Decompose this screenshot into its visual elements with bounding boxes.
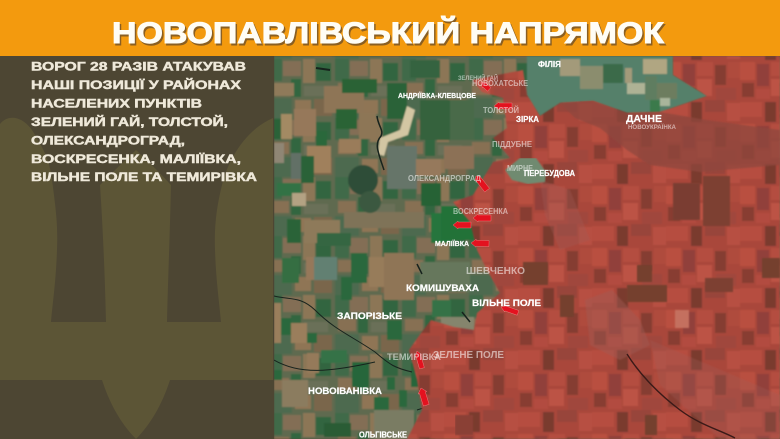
title: НОВОПАВЛІВСЬКИЙ НАПРЯМОК xyxy=(112,16,665,50)
map: settlement labels: ТОЛСТОЙ xyxy=(483,106,519,115)
map: farmland fields xyxy=(274,56,780,439)
map: settlement labels: НОВОХАТСЬКЕ xyxy=(472,79,529,88)
header band xyxy=(0,0,780,56)
map: settlement labels: МАЛІЇВКА xyxy=(435,239,470,248)
icon: trident emblem watermark xyxy=(0,118,273,439)
text block: attack summary: ЗЕЛЕНИЙ ГАЙ, ТОЛСТОЙ, xyxy=(31,114,228,129)
text block: attack summary: ВОСКРЕСЕНКА, МАЛІЇВКА, xyxy=(31,151,241,166)
map: occupied territory xyxy=(407,56,780,439)
arrow: Толстой xyxy=(494,102,512,110)
arrows: attack directions xyxy=(414,79,519,407)
map: settlement labels: ТЕМИРІВКА xyxy=(387,352,441,363)
map: settlement labels: ФІЛІЯ xyxy=(538,60,561,69)
map: unoccupied Myrne pocket xyxy=(505,158,546,184)
panel: satellite map xyxy=(274,56,780,439)
map: settlement labels: ВОСКРЕСЕНКА xyxy=(453,207,508,216)
map: settlement labels: ОЛЕКСАНДРОГРАД xyxy=(408,173,481,183)
text block: attack summary: НАСЕЛЕНИХ ПУНКТІВ xyxy=(31,96,202,110)
map: settlement labels: КОМИШУВАХА xyxy=(406,283,479,294)
map: settlement labels: ПІДДУБНЕ xyxy=(492,140,533,149)
map: settlement labels: АНДРІЇВКА-КЛЕВЦОВЕ xyxy=(398,91,476,100)
map: settlement labels: ДАЧНЕ xyxy=(626,114,662,125)
map: occupied fields detail xyxy=(455,101,780,439)
arrow: Воскресенка upper xyxy=(473,214,491,222)
map: settlement labels: НОВОІВАНІВКА xyxy=(308,386,382,397)
text block: attack summary: ВОРОГ 28 РАЗІВ АТАКУВАВ xyxy=(31,60,246,74)
panel: left text background xyxy=(0,0,275,439)
map: settlement labels: НОВОУКРАЇНКА xyxy=(628,123,676,131)
map: settlement labels: МИРНЕ xyxy=(507,164,534,173)
text block: attack summary xyxy=(31,60,257,184)
map: forest patches xyxy=(348,165,378,195)
map: settlement labels xyxy=(308,60,676,439)
map: settlement labels: ПЕРЕБУДОВА xyxy=(524,169,575,178)
text block: attack summary: ВІЛЬНЕ ПОЛЕ ТА ТЕМИРІВКА xyxy=(31,170,257,184)
map: settlement labels: ВІЛЬНЕ ПОЛЕ xyxy=(472,298,541,309)
arrow: south of Темирівка xyxy=(418,388,430,406)
arrow: Вільне Поле xyxy=(500,306,519,316)
map: settlement labels: ЗЕЛЕНИЙ ГАЙ xyxy=(458,74,498,82)
map: settlement labels: ШЕВЧЕНКО xyxy=(466,266,525,277)
map: settlement labels: ЗІРКА xyxy=(516,115,539,124)
map: river gorge in occupied zone xyxy=(627,354,735,438)
arrow: Воскресенка lower xyxy=(453,221,471,229)
map: settlement labels: ЗЕЛЕНЕ ПОЛЕ xyxy=(433,350,504,361)
map: north band xyxy=(527,56,707,116)
title: НОВОПАВЛІВСЬКИЙ НАПРЯМОК xyxy=(114,18,666,52)
arrow: Олександроград xyxy=(474,176,490,192)
map: rivers xyxy=(274,68,490,410)
map: settlement labels: ЗАПОРІЗЬКЕ xyxy=(337,311,402,322)
arrow: Маліївка xyxy=(471,239,489,248)
map: pale strip xyxy=(378,106,415,156)
arrow: Темирівка xyxy=(414,351,424,370)
text block: attack summary: ОЛЕКСАНДРОГРАД, xyxy=(31,134,185,148)
text block: attack summary: НАШІ ПОЗИЦІЇ У РАЙОНАХ xyxy=(31,77,241,92)
arrow: Зелений Гай xyxy=(480,82,491,92)
